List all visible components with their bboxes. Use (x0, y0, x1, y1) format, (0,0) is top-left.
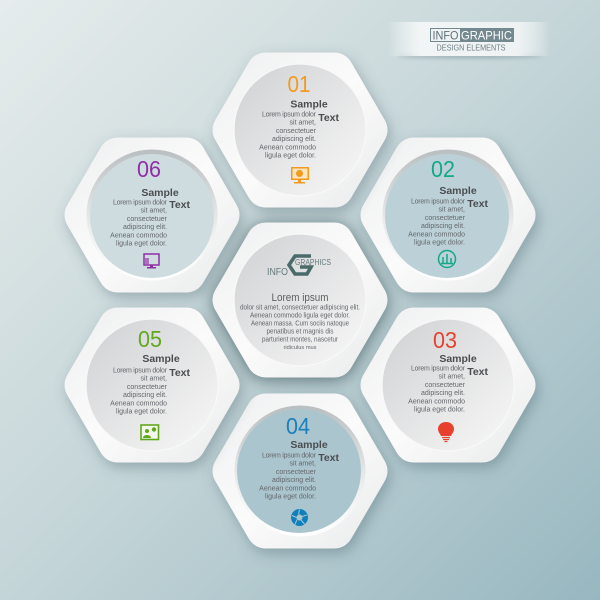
body text: ridiculus mus (284, 345, 317, 351)
body text: adipiscing elit. (123, 224, 167, 231)
body text: consectetuer (127, 216, 168, 223)
body text: sit amet, (141, 376, 167, 383)
number 04: 04 (286, 413, 310, 439)
heading: Text (169, 199, 191, 211)
body text: sit amet, (290, 120, 316, 127)
heading (290, 439, 340, 464)
panel 06 (64, 138, 240, 292)
heading: Sample (439, 353, 477, 365)
body text: Aenean commodo (110, 400, 167, 407)
body text: Aenean commodo (259, 485, 316, 492)
body text: consectetuer (425, 215, 466, 222)
panel 03 (360, 308, 536, 462)
body text: Aenean massa. Cum sociis natoque (251, 320, 349, 328)
number 06: 06 (137, 156, 161, 182)
number 03: 03 (433, 327, 457, 353)
shadow beneath center panel (212, 222, 388, 378)
body text: adipiscing elit. (421, 390, 465, 397)
body text: ligula eget dolor. (414, 406, 465, 414)
heading: lorem ipsum: Lorem ipsum (272, 292, 328, 304)
body text: Aenean commodo (408, 398, 465, 405)
body text: adipiscing elit. (123, 392, 167, 399)
body text: Aenean commodo ligula eget dolor. (250, 312, 350, 320)
logo: info graphics: GRAPHICS (295, 258, 331, 267)
body text: consectetuer (276, 469, 317, 476)
body text: ligula eget dolor. (414, 240, 465, 246)
body text: Lorem ipsum dolor (262, 112, 317, 118)
body text: consectetuer (276, 128, 317, 135)
body text: ligula eget dolor. (116, 240, 167, 248)
heading: Text (169, 367, 191, 379)
heading (141, 187, 191, 211)
body text (110, 368, 168, 416)
panel: center (212, 222, 388, 378)
icon: chart badge (438, 250, 456, 268)
body text: sit amet, (141, 208, 167, 215)
heading: Sample (439, 185, 477, 197)
body text: Aenean commodo (110, 232, 167, 239)
body text (110, 200, 168, 248)
banner: infographic design elements: INFO (432, 28, 458, 42)
body text: Lorem ipsum dolor (262, 452, 317, 460)
body text: ligula eget dolor. (265, 152, 316, 160)
banner: infographic design elements: GRAPHIC (461, 28, 512, 42)
body text: consectetuer (127, 384, 168, 391)
body text: adipiscing elit. (272, 136, 316, 143)
heading: Sample (290, 439, 328, 451)
panel 04 (212, 394, 388, 548)
panel 05 (64, 308, 240, 462)
heading: Sample (290, 98, 328, 110)
heading (439, 353, 489, 378)
heading: Sample (141, 187, 179, 199)
body text (240, 304, 360, 351)
body text (408, 366, 466, 414)
banner: infographic design elements (388, 22, 550, 58)
body text: ligula eget dolor. (265, 494, 316, 500)
icon: monitor (144, 254, 159, 268)
body text: sit amet, (290, 461, 316, 468)
heading: Sample (142, 353, 180, 365)
banner: infographic design elements: DESIGN ELEMENTS (436, 42, 506, 52)
heading (142, 353, 191, 379)
heading: Text (318, 112, 340, 124)
body text: sit amet, (439, 207, 465, 214)
body text: Lorem ipsum dolor (113, 200, 168, 206)
number 05: 05 (138, 326, 162, 352)
heading (290, 98, 340, 124)
logo: info graphics: INFO (267, 267, 288, 278)
body text: Lorem ipsum dolor (411, 366, 466, 372)
number 01: 01 (288, 71, 310, 97)
body text: dolor sit amet, consectetuer adipiscing elit. (240, 304, 360, 312)
body text: ligula eget dolor. (116, 408, 167, 416)
heading: Text (467, 198, 489, 210)
logo: info graphics (267, 256, 331, 278)
body text: Aenean commodo (408, 231, 465, 238)
body text (408, 198, 466, 246)
body text: Lorem ipsum dolor (411, 198, 466, 206)
body text: penatibus et magnis dis (266, 328, 334, 336)
number 02: 02 (431, 156, 455, 182)
body text: Lorem ipsum dolor (113, 368, 168, 374)
body text: parturient montes, nascetur (262, 336, 339, 344)
body text (259, 452, 317, 500)
icon: light bulb (438, 422, 454, 442)
body text: Aenean commodo (259, 144, 316, 151)
icon: monitor with pie (291, 167, 309, 184)
heading: Text (318, 452, 340, 464)
heading: Text (467, 366, 489, 378)
body text: adipiscing elit. (421, 223, 465, 230)
body text: adipiscing elit. (272, 477, 316, 484)
heading (439, 185, 489, 210)
body text: consectetuer (425, 382, 466, 389)
body text: sit amet, (439, 374, 465, 381)
panel 02 (360, 138, 536, 292)
icon: aperture (291, 509, 308, 526)
icon: presentation board (141, 425, 158, 440)
body text (259, 112, 317, 160)
panel 01 (212, 52, 388, 208)
